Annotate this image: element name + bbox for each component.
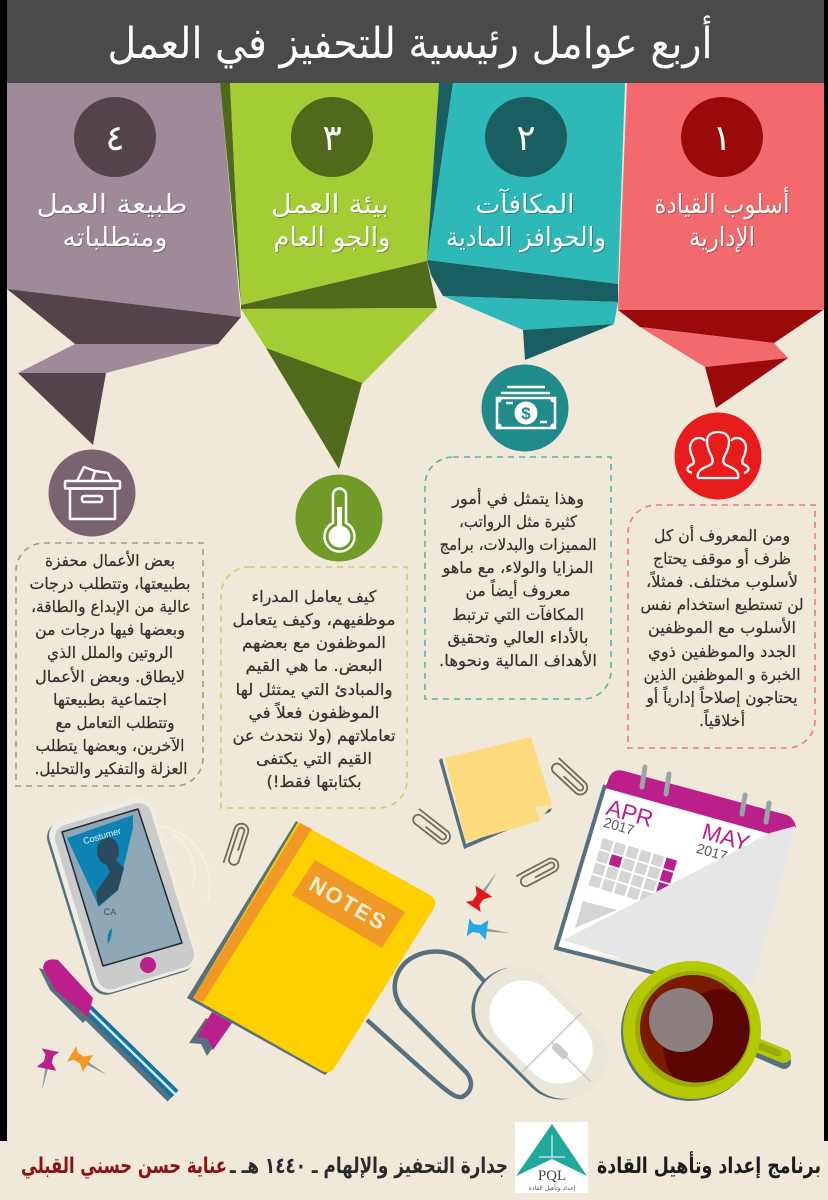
number circle 2 xyxy=(485,97,567,177)
paperclip 3 xyxy=(410,809,453,846)
banner 4: nature of work xyxy=(7,83,241,445)
heading 2: والحوافز المادية xyxy=(446,223,606,253)
text box 4: الآخرين، وبعضها يتطلب xyxy=(36,736,184,756)
title bar: أربع عوامل رئيسية للتحفيز في العمل xyxy=(108,15,712,69)
banner 3: work environment xyxy=(220,83,439,469)
pen illustration xyxy=(39,959,175,1099)
text box 1: ومن المعروف أن كل xyxy=(654,525,790,546)
computer mouse with cable xyxy=(367,948,624,1118)
months: APR xyxy=(604,794,656,832)
phone illustration: Costumer xyxy=(82,826,122,846)
banner 2: rewards xyxy=(427,83,625,360)
title bar xyxy=(7,0,824,83)
text box 2: معروف أيضاً من xyxy=(466,578,570,601)
heading 3: بيئة العمل xyxy=(271,190,389,220)
heading 3 xyxy=(271,190,390,253)
text box 3: البعض. ما هي القيم xyxy=(246,656,382,676)
text box 4: وتتطلب التعامل مع xyxy=(56,713,174,733)
phone illustration: CA xyxy=(104,907,116,917)
text box 3 xyxy=(221,567,407,808)
text box 1: الجدد والموظفين ذوي xyxy=(648,642,796,662)
paperclip 2 xyxy=(549,758,590,797)
footer credit: عناية حسن حسني القبلي xyxy=(21,1154,227,1179)
heading 1 xyxy=(654,186,790,253)
text box 4: الروتين والملل الذي xyxy=(47,643,173,663)
heading 2: المكافآت xyxy=(476,188,574,220)
text box 3: بكتابتها فقط!) xyxy=(266,772,362,792)
text box 1 xyxy=(628,505,815,748)
number circle 4: ٤ xyxy=(105,118,125,159)
footer credit: جدارة التحفيز والإلهام ـ ١٤٤٠ هـ ـ xyxy=(229,1154,508,1179)
number circle 1 xyxy=(681,97,763,177)
text box 3: كيف يعامل المدراء xyxy=(252,587,377,607)
heading 2 xyxy=(446,188,606,253)
number circle 3: ٣ xyxy=(322,118,342,159)
text box 3: موظفيهم، وكيف يتعامل xyxy=(232,610,396,630)
text box 1: الأسلوب مع الموظفين xyxy=(648,617,796,638)
banner 1: leadership style xyxy=(618,83,824,408)
heading 1: أسلوب القيادة xyxy=(654,186,790,220)
icon: thermometer xyxy=(296,474,382,562)
text box 4: العزلة والتفكير والتحليل. xyxy=(34,759,188,779)
coffee cup xyxy=(621,961,784,1101)
text box 4: بطبيعتها، وتتطلب درجات xyxy=(30,574,190,594)
sticky note xyxy=(439,737,552,849)
paperclip 4 xyxy=(516,856,561,889)
text box 2: المزايا والولاء، مع ماهو xyxy=(441,558,594,578)
text box 1: لن تستطيع استخدام نفس xyxy=(640,595,804,615)
calendar illustration xyxy=(555,767,796,985)
text box 3: القيم التي يكتفى xyxy=(256,749,372,769)
text box 2: الأهداف المالية ونحوها. xyxy=(439,650,597,671)
phone illustration xyxy=(43,793,210,999)
text box 1: يحتاجون إصلاحاً إدارياً أو xyxy=(646,685,798,708)
icon: money xyxy=(482,364,568,452)
icon: money: $ xyxy=(521,404,531,423)
text box 4: بعض الأعمال محفزة xyxy=(45,550,175,571)
months: 2017 xyxy=(695,840,729,864)
logo PQL: PQL xyxy=(538,1168,566,1184)
months: 2017 xyxy=(602,814,636,838)
pushpin blue xyxy=(467,917,511,943)
text box 3: الموظفون مع بعضهم xyxy=(242,633,386,653)
notebook illustration: NOTES xyxy=(305,871,392,936)
heading 4: طبيعة العمل xyxy=(36,190,188,220)
pushpin magenta xyxy=(32,1048,60,1092)
text box 2: بالأداء العالي وتحقيق xyxy=(448,627,588,648)
months: MAY xyxy=(699,818,753,856)
text box 4: وبعضها فيها درجات من xyxy=(35,620,185,640)
heading 4 xyxy=(36,190,188,253)
pushpin red xyxy=(465,867,505,913)
text box 4: عالية من الإبداع والطاقة، xyxy=(31,597,191,617)
text box 1: أخلاقياً. xyxy=(699,708,745,730)
text box 3: والمبادئ التي يمتثل لها xyxy=(236,680,392,700)
number circle 2: ٢ xyxy=(516,118,536,159)
text box 1: ظرف أو موقف يحتاج xyxy=(653,548,791,569)
text box 2 xyxy=(425,457,611,699)
text box 2: كثيرة مثل الرواتب، xyxy=(459,512,577,532)
text box 3: الموظفون فعلاً في xyxy=(248,702,380,723)
text box 4 xyxy=(16,543,203,786)
notebook illustration xyxy=(187,821,435,1075)
heading 4: ومتطلباته xyxy=(62,223,168,253)
paperclip 1 xyxy=(224,822,250,867)
text box 2: وهذا يتمثل في أمور xyxy=(451,488,584,509)
text box 1: لأسلوب مختلف. فمثلاً، xyxy=(646,571,798,592)
number circle 3 xyxy=(291,97,373,177)
heading 3: والجو العام xyxy=(274,223,390,253)
icon: box xyxy=(48,450,136,536)
text box 4: لايطاق. وبعض الأعمال xyxy=(35,666,185,687)
number circle 1: ١ xyxy=(712,118,732,159)
number circle 4 xyxy=(74,97,156,177)
text box 3: تعاملاتهم (ولا نتحدث عن xyxy=(232,726,396,746)
text box 2: المميزات والبدلات، برامج xyxy=(440,535,596,555)
heading 1: الإدارية xyxy=(689,223,755,253)
logo PQL: إعداد وتأهيل القادة xyxy=(529,1183,576,1192)
calendar rings xyxy=(642,767,769,822)
logo PQL xyxy=(515,1122,588,1193)
calendar grid xyxy=(589,838,677,908)
months xyxy=(602,794,753,864)
footer credit xyxy=(21,1150,821,1179)
pushpin orange xyxy=(67,1045,112,1084)
text box 1: الخبرة و الموظفين الذين xyxy=(644,665,800,685)
icon: people xyxy=(674,412,762,500)
text box 4: اجتماعية بطبيعتها xyxy=(53,690,167,710)
text box 2: المكافآت التي ترتبط xyxy=(452,605,584,625)
